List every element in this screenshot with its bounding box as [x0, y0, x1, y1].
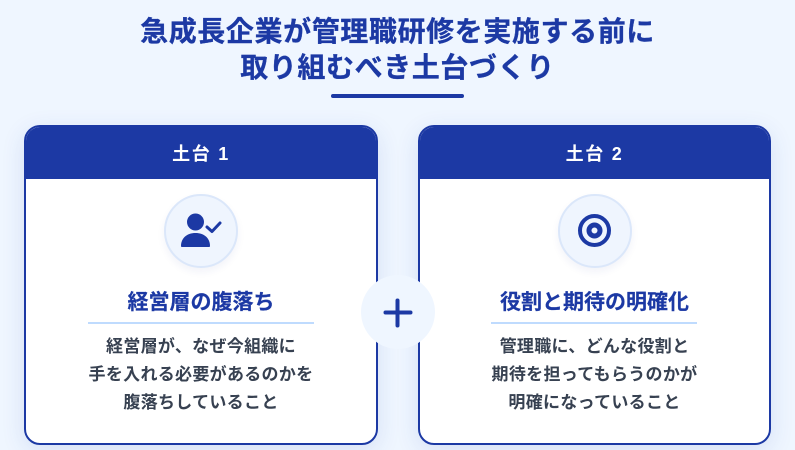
- title: [140, 16, 655, 83]
- title: 取り組むべき土台づくり: [240, 52, 555, 83]
- panel: foundation 2: [418, 125, 771, 445]
- title underline: [331, 94, 464, 98]
- description: 明確になっていること: [508, 393, 681, 412]
- description: [492, 337, 697, 412]
- panel header: foundation 1: [26, 127, 376, 179]
- title: 急成長企業が管理職研修を実施する前に: [140, 16, 655, 47]
- description: 手を入れる必要があるのかを: [89, 365, 313, 384]
- panel: foundation 1: [24, 125, 378, 445]
- sub-heading divider: [491, 322, 697, 324]
- icon: target: [558, 194, 632, 268]
- sub-heading: 役割と期待の明確化: [500, 291, 689, 314]
- icon: plus connector: [361, 275, 435, 349]
- description: 管理職に、どんな役割と: [500, 337, 689, 356]
- panel header: foundation 2: [420, 127, 769, 179]
- panel header: foundation 1: 土台 1: [172, 144, 230, 164]
- description: 腹落ちしていること: [123, 393, 279, 412]
- sub-heading divider: [88, 322, 314, 324]
- description: 経営層が、なぜ今組織に: [106, 337, 296, 356]
- sub-heading: 経営層の腹落ち: [128, 291, 274, 314]
- icon: person with check mark: [164, 194, 238, 268]
- description: [89, 337, 313, 412]
- left card shadow: [24, 125, 378, 445]
- right card shadow: [418, 125, 771, 445]
- description: 期待を担ってもらうのかが: [492, 365, 697, 384]
- panel header: foundation 2: 土台 2: [566, 144, 623, 164]
